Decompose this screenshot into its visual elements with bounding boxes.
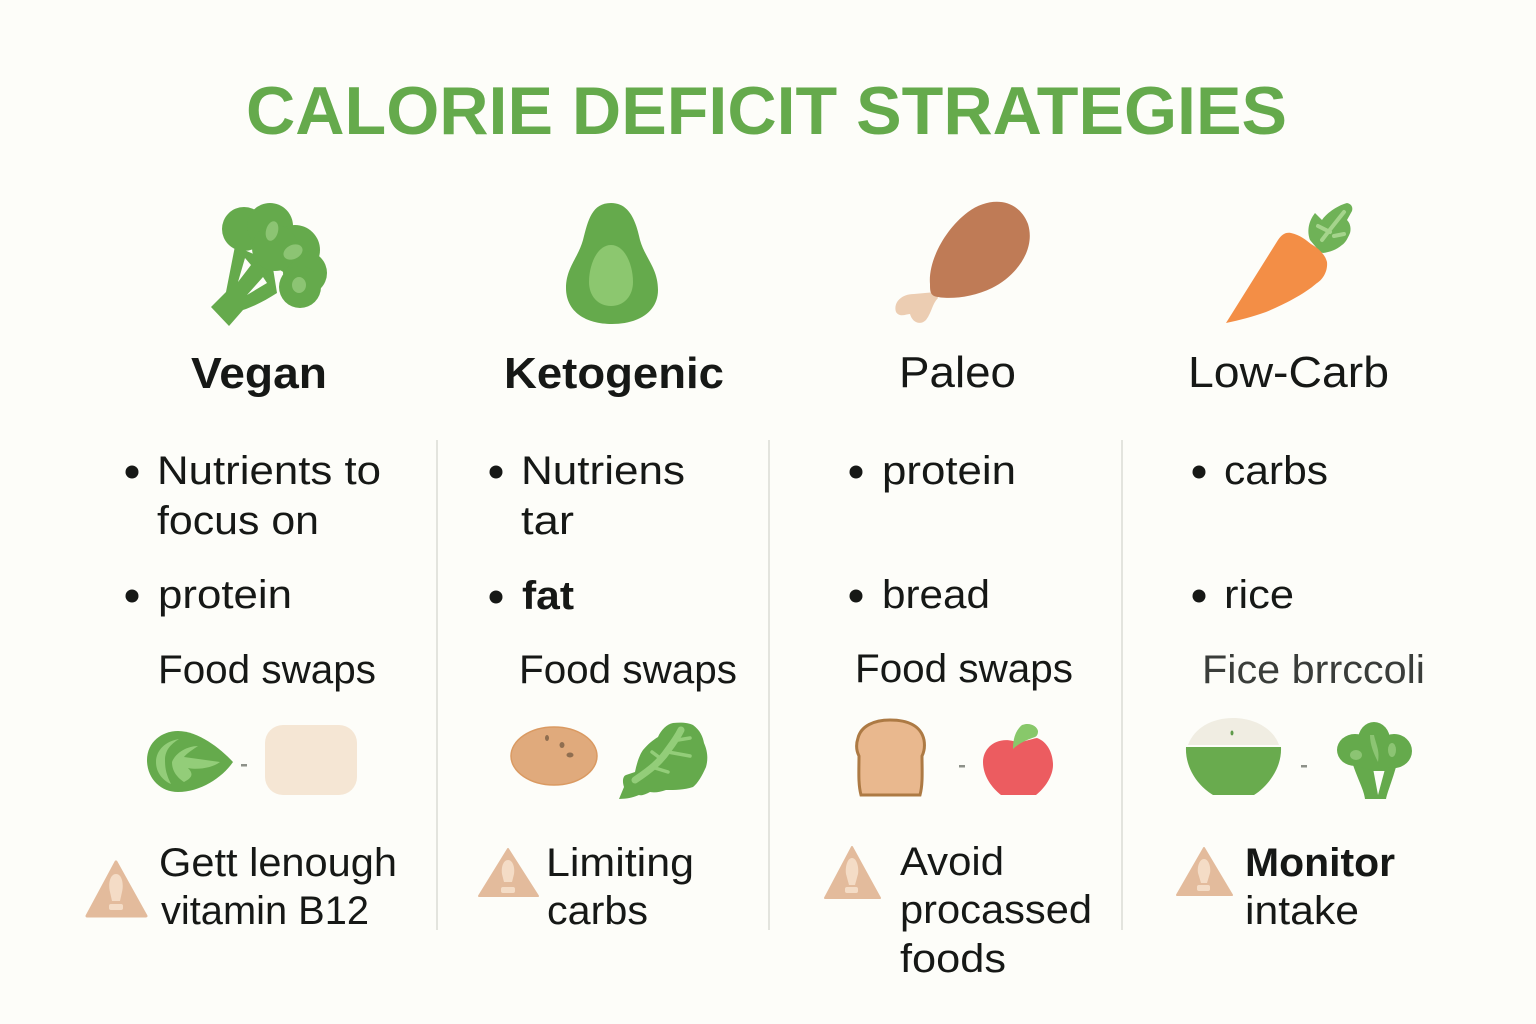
warning: monitor intake: intake: [1245, 889, 1359, 933]
icon: bread: [857, 720, 924, 795]
icon: rice bowl: [1186, 718, 1281, 795]
icon: leafy greens: [619, 723, 707, 799]
warning: limiting carbs: [479, 841, 694, 933]
icon: potato: [511, 727, 597, 785]
bullet list: nutrients: protein: [158, 573, 292, 617]
icon: spinach leaf: [147, 731, 233, 792]
bullet list: nutrients: rice: [1224, 573, 1294, 617]
warning: monitor intake: Monitor: [1245, 841, 1395, 885]
subheading: food swaps: Food swaps: [519, 648, 737, 692]
bullet list: nutrients: [850, 449, 1016, 617]
icon: broccoli: [211, 203, 327, 326]
icon: broccoli small: [1337, 722, 1412, 799]
panel: paleo: [825, 202, 1092, 981]
warning: avoid processed foods: [825, 840, 1092, 981]
bullet list: nutrients: carbs: [1224, 449, 1328, 493]
subheading: food swaps: Fice brrccoli: [1202, 648, 1425, 692]
bullet list: nutrients: Nutrients to: [157, 449, 381, 493]
warning: monitor intake: [1177, 841, 1395, 933]
warning: vitamin B12: Gett lenough: [159, 841, 397, 885]
warning: limiting carbs: Limiting: [546, 841, 694, 885]
bullet list: nutrients: [126, 449, 381, 617]
bullet list: nutrients: focus on: [157, 499, 319, 543]
subheading: food swaps: Food swaps: [158, 648, 376, 692]
warning: avoid processed foods: Avoid: [900, 840, 1004, 884]
warning: vitamin B12: [87, 841, 397, 933]
panel: low-carb: [1177, 203, 1425, 933]
icon: chicken drumstick: [895, 202, 1030, 323]
icon: tofu: [265, 725, 357, 795]
icon: carrot: [1226, 203, 1352, 323]
icon: apple: [983, 724, 1053, 795]
heading: Vegan: Vegan: [191, 349, 327, 398]
warning: avoid processed foods: procassed: [900, 888, 1092, 932]
panel: vegan: [87, 203, 397, 933]
warning: avoid processed foods: foods: [900, 937, 1006, 981]
warning: vitamin B12: vitamin B12: [161, 889, 369, 933]
bullet list: nutrients: tar: [521, 499, 574, 543]
panel: ketogenic: [479, 203, 737, 933]
warning: limiting carbs: carbs: [547, 889, 648, 933]
bullet list: nutrients: bread: [882, 573, 990, 617]
title: CALORIE DEFICIT STRATEGIES: [246, 73, 1287, 149]
heading: Paleo: Paleo: [899, 348, 1016, 397]
bullet list: nutrients: fat: [522, 574, 574, 618]
bullet list: nutrients: protein: [882, 449, 1016, 493]
heading: Low-Carb: Low-Carb: [1188, 348, 1389, 397]
heading: Ketogenic: Ketogenic: [504, 349, 724, 398]
icon: avocado: [566, 203, 658, 324]
subheading: food swaps: Food swaps: [855, 647, 1073, 691]
bullet list: nutrients: [490, 449, 685, 618]
bullet list: nutrients: [1192, 449, 1328, 617]
bullet list: nutrients: Nutriens: [521, 449, 685, 493]
